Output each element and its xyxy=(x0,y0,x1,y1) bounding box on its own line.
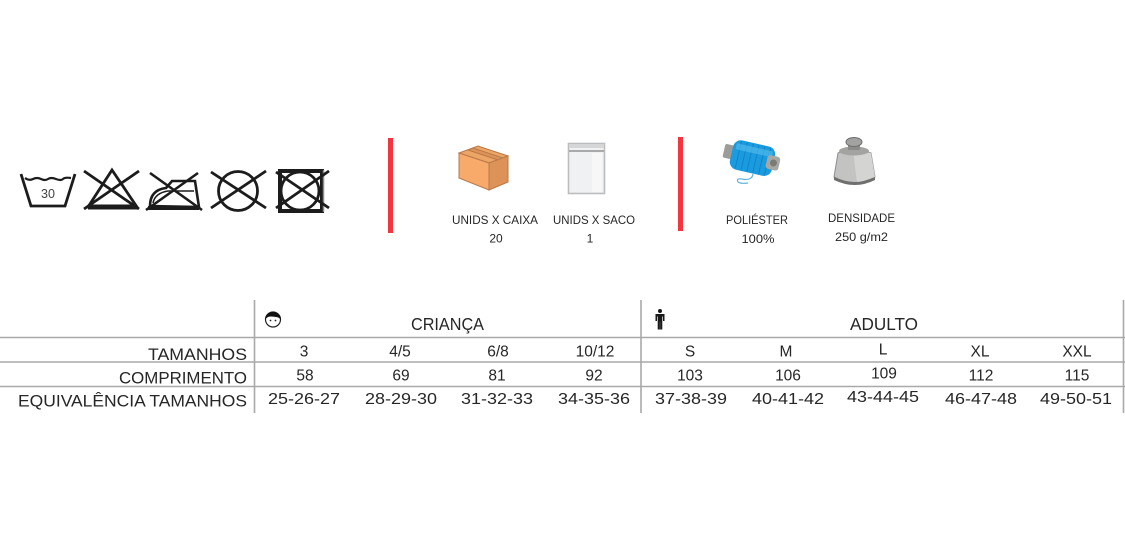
row: sizes: 10/12 xyxy=(576,344,614,360)
icon: do not dry clean xyxy=(276,170,329,212)
row: size equivalence: 49-50-51 xyxy=(1040,391,1112,408)
label: density xyxy=(828,211,895,244)
table: sizes xyxy=(0,300,1125,413)
row: sizes: L xyxy=(879,342,888,358)
label: units per bag: UNIDS X SACO xyxy=(553,213,635,227)
label: units per box: UNIDS X CAIXA xyxy=(452,213,538,227)
row: sizes: XXL xyxy=(1062,344,1092,360)
row: sizes: S xyxy=(685,344,695,360)
row: length: 112 xyxy=(969,368,993,384)
label: density: DENSIDADE xyxy=(828,211,895,225)
row: sizes: 3 xyxy=(300,344,308,360)
label: polyester xyxy=(726,212,788,246)
row labels: COMPRIMENTO xyxy=(119,368,247,388)
row labels: EQUIVALÊNCIA TAMANHOS xyxy=(18,392,247,410)
row: length: 109 xyxy=(871,366,897,382)
row labels xyxy=(18,345,247,410)
row: sizes: XL xyxy=(971,344,990,360)
table grid xyxy=(0,300,1125,413)
row: size equivalence: 37-38-39 xyxy=(655,391,727,408)
label: polyester: POLIÉSTER xyxy=(726,212,788,227)
icon: child xyxy=(265,312,281,327)
row: length: 103 xyxy=(677,368,703,384)
row: length: 81 xyxy=(488,368,506,384)
row: sizes: M xyxy=(780,344,792,360)
row: length: 69 xyxy=(392,368,410,384)
icon: fabric weight xyxy=(834,138,875,185)
icon: cardboard box xyxy=(459,146,508,190)
icon: wash at 30 degrees xyxy=(21,174,75,206)
icon: plastic bag xyxy=(568,144,604,194)
icon: adult xyxy=(655,309,664,330)
label: units per box: 20 xyxy=(489,232,503,246)
row: size equivalence: 34-35-36 xyxy=(558,391,630,408)
icon: do not iron xyxy=(146,173,202,210)
row: length: 58 xyxy=(296,368,314,384)
red divider left xyxy=(388,138,393,233)
label: units per bag: 1 xyxy=(587,232,594,246)
row: size equivalence: 43-44-45 xyxy=(847,389,919,406)
row: size equivalence: 46-47-48 xyxy=(945,391,1017,408)
label: density: 250 g/m2 xyxy=(835,230,888,244)
row labels: TAMANHOS xyxy=(148,345,247,364)
row: length: 115 xyxy=(1065,368,1089,384)
heading: adult: ADULTO xyxy=(850,314,918,334)
label: units per box xyxy=(452,213,538,246)
row: sizes: 4/5 xyxy=(389,344,411,360)
label: units per bag xyxy=(553,213,635,246)
icon: polyester spool xyxy=(720,137,783,183)
icon: do not tumble dry xyxy=(211,171,266,210)
row: size equivalence: 25-26-27 xyxy=(268,391,340,408)
row: size equivalence xyxy=(268,389,1112,408)
row: size equivalence: 31-32-33 xyxy=(461,391,533,408)
icon: wash at 30 degrees: 30 xyxy=(41,187,55,201)
red divider right xyxy=(678,137,683,231)
icon: do not bleach xyxy=(84,170,139,209)
row: length xyxy=(296,366,1089,384)
row: size equivalence: 28-29-30 xyxy=(365,391,437,408)
label: polyester: 100% xyxy=(742,232,775,246)
row: size equivalence: 40-41-42 xyxy=(752,391,824,408)
row: sizes: 6/8 xyxy=(487,344,509,360)
row: length: 106 xyxy=(775,368,801,384)
heading: child: CRIANÇA xyxy=(411,314,484,334)
row: sizes xyxy=(300,342,1092,360)
row: length: 92 xyxy=(585,368,603,384)
